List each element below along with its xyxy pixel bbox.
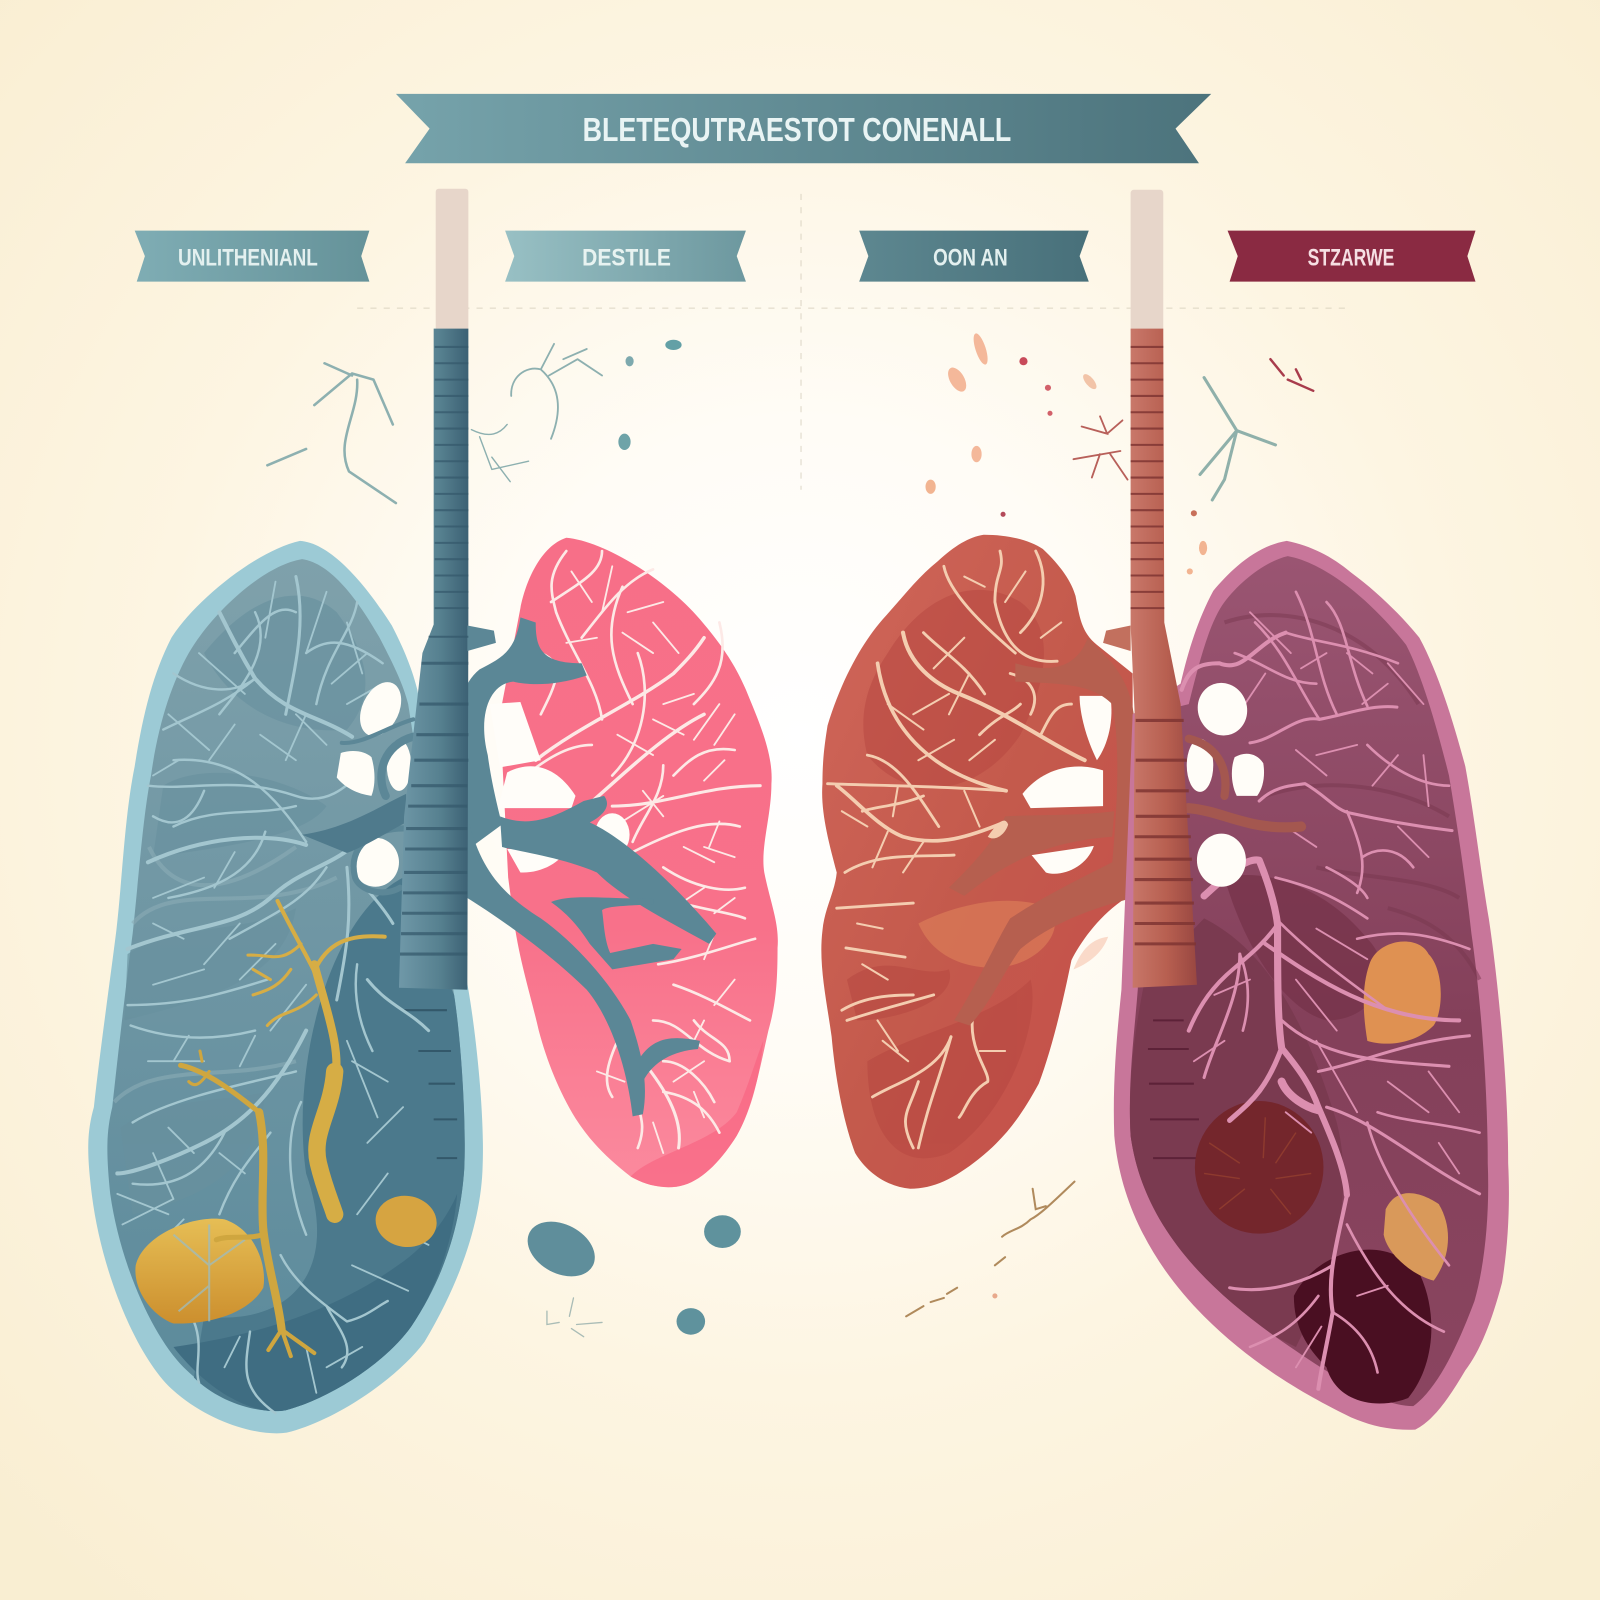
yellow airway and nodules [135,901,440,1356]
label banner 4: STZARWE [1308,244,1394,271]
blue bronchus to pink lung [456,617,716,1116]
label banner 4 [1228,231,1476,282]
lung: blue [88,541,483,1433]
blue lung veins [117,577,429,1413]
red lung mottling [847,590,1044,1158]
yellow nodule small [372,1192,440,1251]
blue lung interior [107,559,465,1411]
trachea: right [1103,190,1197,988]
left trachea body [399,329,468,990]
orange lesion upper [1364,941,1441,1044]
pink lung openings [490,702,630,873]
plum lung lower shade [1130,918,1343,1347]
left trachea rings [400,347,468,954]
stones [518,1211,741,1337]
blue lung lobes [114,847,337,1102]
red lung veins [828,551,1085,1148]
title banner [396,94,1211,163]
lung: pink [456,538,778,1187]
blue lung base [173,1194,457,1411]
red hub tip [988,821,1008,838]
left trachea pale tube [436,189,468,332]
label banner 3: OON AN [933,244,1008,271]
right trachea rings [1131,347,1196,944]
red lung orange patch [918,901,1055,968]
pink lung veins [526,551,760,1153]
blue lung rib lines [403,1010,457,1158]
blue main branch [302,794,406,853]
red lung openings [1022,696,1111,874]
yellow airway 1 [248,901,385,1214]
red bronchi [949,638,1135,1026]
stone medium [704,1215,741,1248]
trachea: left [399,189,496,990]
left trachea flange [467,626,496,651]
yellow airway 2 [181,1051,314,1356]
plum lung openings [1187,676,1264,887]
label banner 2 [505,231,746,282]
floating doodles: left [267,340,682,503]
label banner 1 [135,231,369,282]
plum lung side branches [1189,739,1301,827]
blue lung openings [337,676,411,887]
label banner 1: UNLITHENIANL [178,244,318,271]
blue lung lower shadow [194,878,465,1411]
red lung body [821,535,1133,1189]
plum rib lines [1148,1020,1204,1158]
plum upper lobes [1224,615,1480,980]
orange lesion lower [1384,1193,1448,1281]
right trachea pale tube [1131,190,1163,333]
right trachea body [1131,329,1197,988]
pink lung body [500,538,778,1187]
dark lesion [1294,1250,1431,1403]
title banner: BLETEQUTRAESTOT CONENALL [583,112,1011,149]
label banner 3 [859,231,1089,282]
stone large [518,1211,604,1287]
brown lesion [1195,1101,1323,1234]
twigs [906,1182,1074,1316]
red smear [1073,937,1108,969]
floating particles: right [926,332,1313,574]
blue lung darker lobe cells [120,596,365,1214]
stone small [677,1308,705,1335]
lung: plum [1114,541,1509,1430]
blue lung rim [88,541,483,1433]
plum lung rim [1114,541,1509,1430]
right trachea flange [1103,626,1131,651]
debris [547,1298,602,1337]
yellow nodule large [135,1219,264,1324]
guide lines [357,194,1347,490]
label banner 2: DESTILE [582,244,671,271]
yellow nodule veins [173,1224,245,1321]
lung: red [821,535,1135,1189]
blue branch arcs [342,719,413,892]
plum lung dark band [1224,875,1382,1020]
plum lung veins [1182,592,1480,1389]
plum lung interior [1130,556,1488,1406]
pink lung pale edge [631,1041,763,1187]
